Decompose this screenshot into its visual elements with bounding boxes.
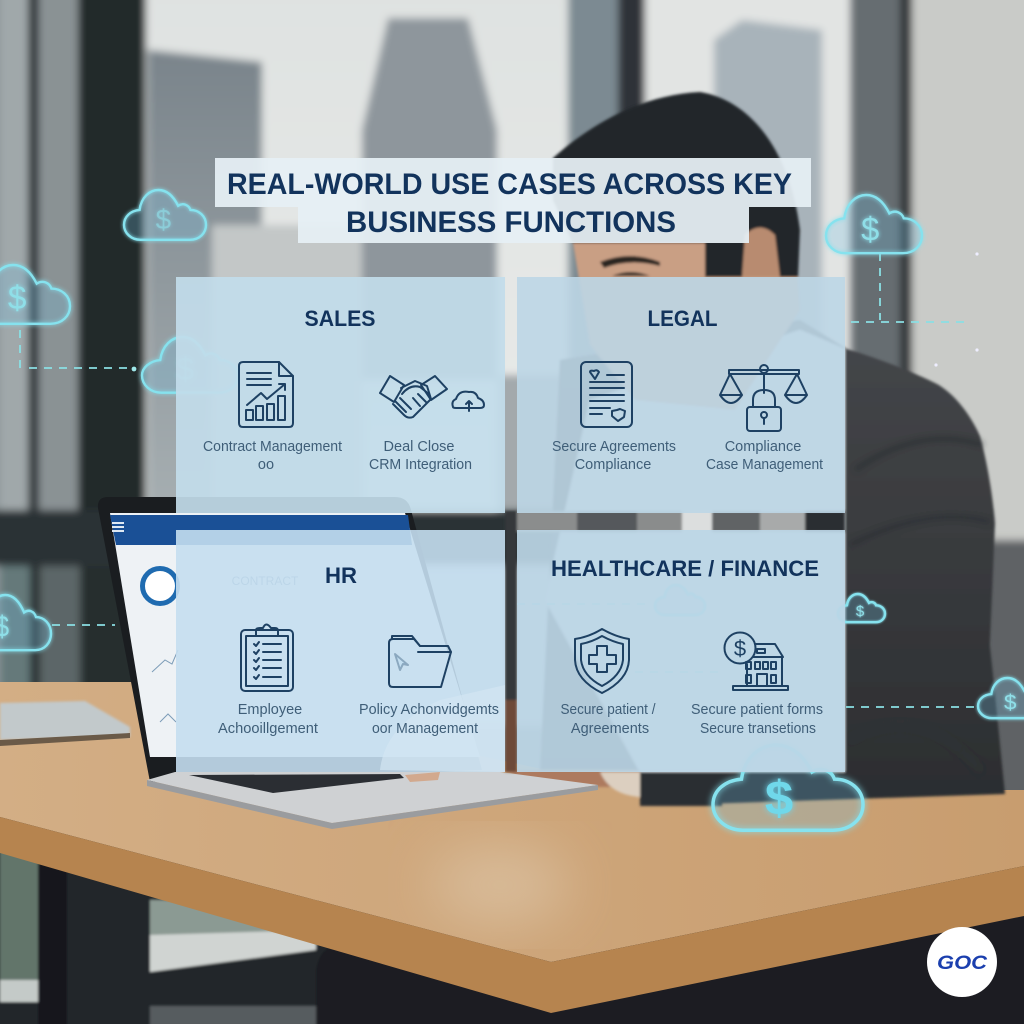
icon: bank building with dollar [724, 632, 788, 690]
icon: large cloud bottom [713, 745, 863, 830]
icon: shield with cross [575, 629, 629, 693]
heading: healthcare finance: HEALTHCARE / FINANCE [551, 556, 819, 581]
laptop: CONTRACT [232, 574, 299, 588]
icon: contract with growth chart [239, 362, 293, 427]
icon: cloud far right [978, 678, 1024, 718]
icon: cloud mid left [142, 337, 238, 393]
label: policy acknowledgments: Policy Achonvidgemts [359, 702, 499, 718]
heading: sales: SALES [304, 306, 376, 331]
label: acknowledgement: Achooillgement [218, 721, 318, 737]
icon: cloud lower left [0, 595, 51, 650]
tablet on table [0, 701, 130, 746]
label: secure patient forms: Secure patient forms [691, 702, 823, 718]
label: case management: Case Management [706, 457, 823, 473]
label: crm integration: CRM Integration [369, 457, 472, 473]
label: compliance right: Compliance [725, 439, 801, 455]
panel: legal [517, 277, 845, 513]
icon: cloud top right: $ [861, 210, 879, 248]
icon: cloud far right: $ [1004, 690, 1016, 714]
label: compliance left: Compliance [575, 457, 651, 473]
panel: hr [176, 530, 505, 772]
label: secure patient: Secure patient / [560, 702, 656, 718]
title banner: BUSINESS FUNCTIONS [346, 206, 676, 239]
title banner: REAL-WORLD USE CASES ACROSS KEY [227, 168, 792, 201]
label: deal close: Deal Close [384, 439, 454, 455]
icon: small cloud right [838, 594, 885, 622]
icon: cloud far left: $ [8, 280, 26, 317]
dashed connector lines and dots [20, 252, 979, 707]
background: man in suit [505, 92, 1005, 806]
hand shape seen through panel [380, 685, 505, 772]
icon: clipboard checklist [241, 624, 293, 691]
icon: faint cloud behind healthcare panel [655, 585, 705, 615]
icon: cloud far left [0, 265, 70, 324]
label: secure transactions: Secure transetions [700, 721, 816, 737]
icon: small cloud right: $ [856, 603, 865, 620]
icon: folder with cursor [389, 636, 451, 687]
label: agreements: Agreements [571, 721, 649, 737]
heading: hr: HR [325, 563, 357, 588]
icon: large cloud bottom: $ [765, 771, 793, 825]
icon: scales with padlock [720, 365, 807, 431]
icon: handshake with cloud [380, 376, 484, 418]
label: employee: Employee [238, 702, 302, 718]
icon: cloud top left: $ [156, 204, 172, 235]
logo badge: GOC: GOC [937, 953, 987, 974]
title banner [215, 158, 811, 243]
panel: sales [176, 277, 505, 513]
label: secure agreements: Secure Agreements [552, 439, 676, 455]
text: dollar sign on bank icon: $ [734, 636, 746, 661]
logo badge: GOC [927, 927, 997, 997]
decorative stripes between panels [505, 511, 845, 772]
label: contract management: Contract Management [203, 439, 342, 455]
laptop [98, 497, 598, 829]
panel: healthcare finance [517, 530, 845, 772]
icon: cloud top left [124, 190, 206, 240]
icon: cloud top right [826, 195, 922, 253]
icon: cloud mid left: $ [176, 350, 194, 387]
icon: certificate document [581, 362, 632, 427]
label: management: oor Management [372, 721, 478, 737]
label: oo: oo [258, 457, 274, 473]
background: table and lower area [0, 682, 1024, 1024]
heading: legal: LEGAL [648, 306, 718, 331]
